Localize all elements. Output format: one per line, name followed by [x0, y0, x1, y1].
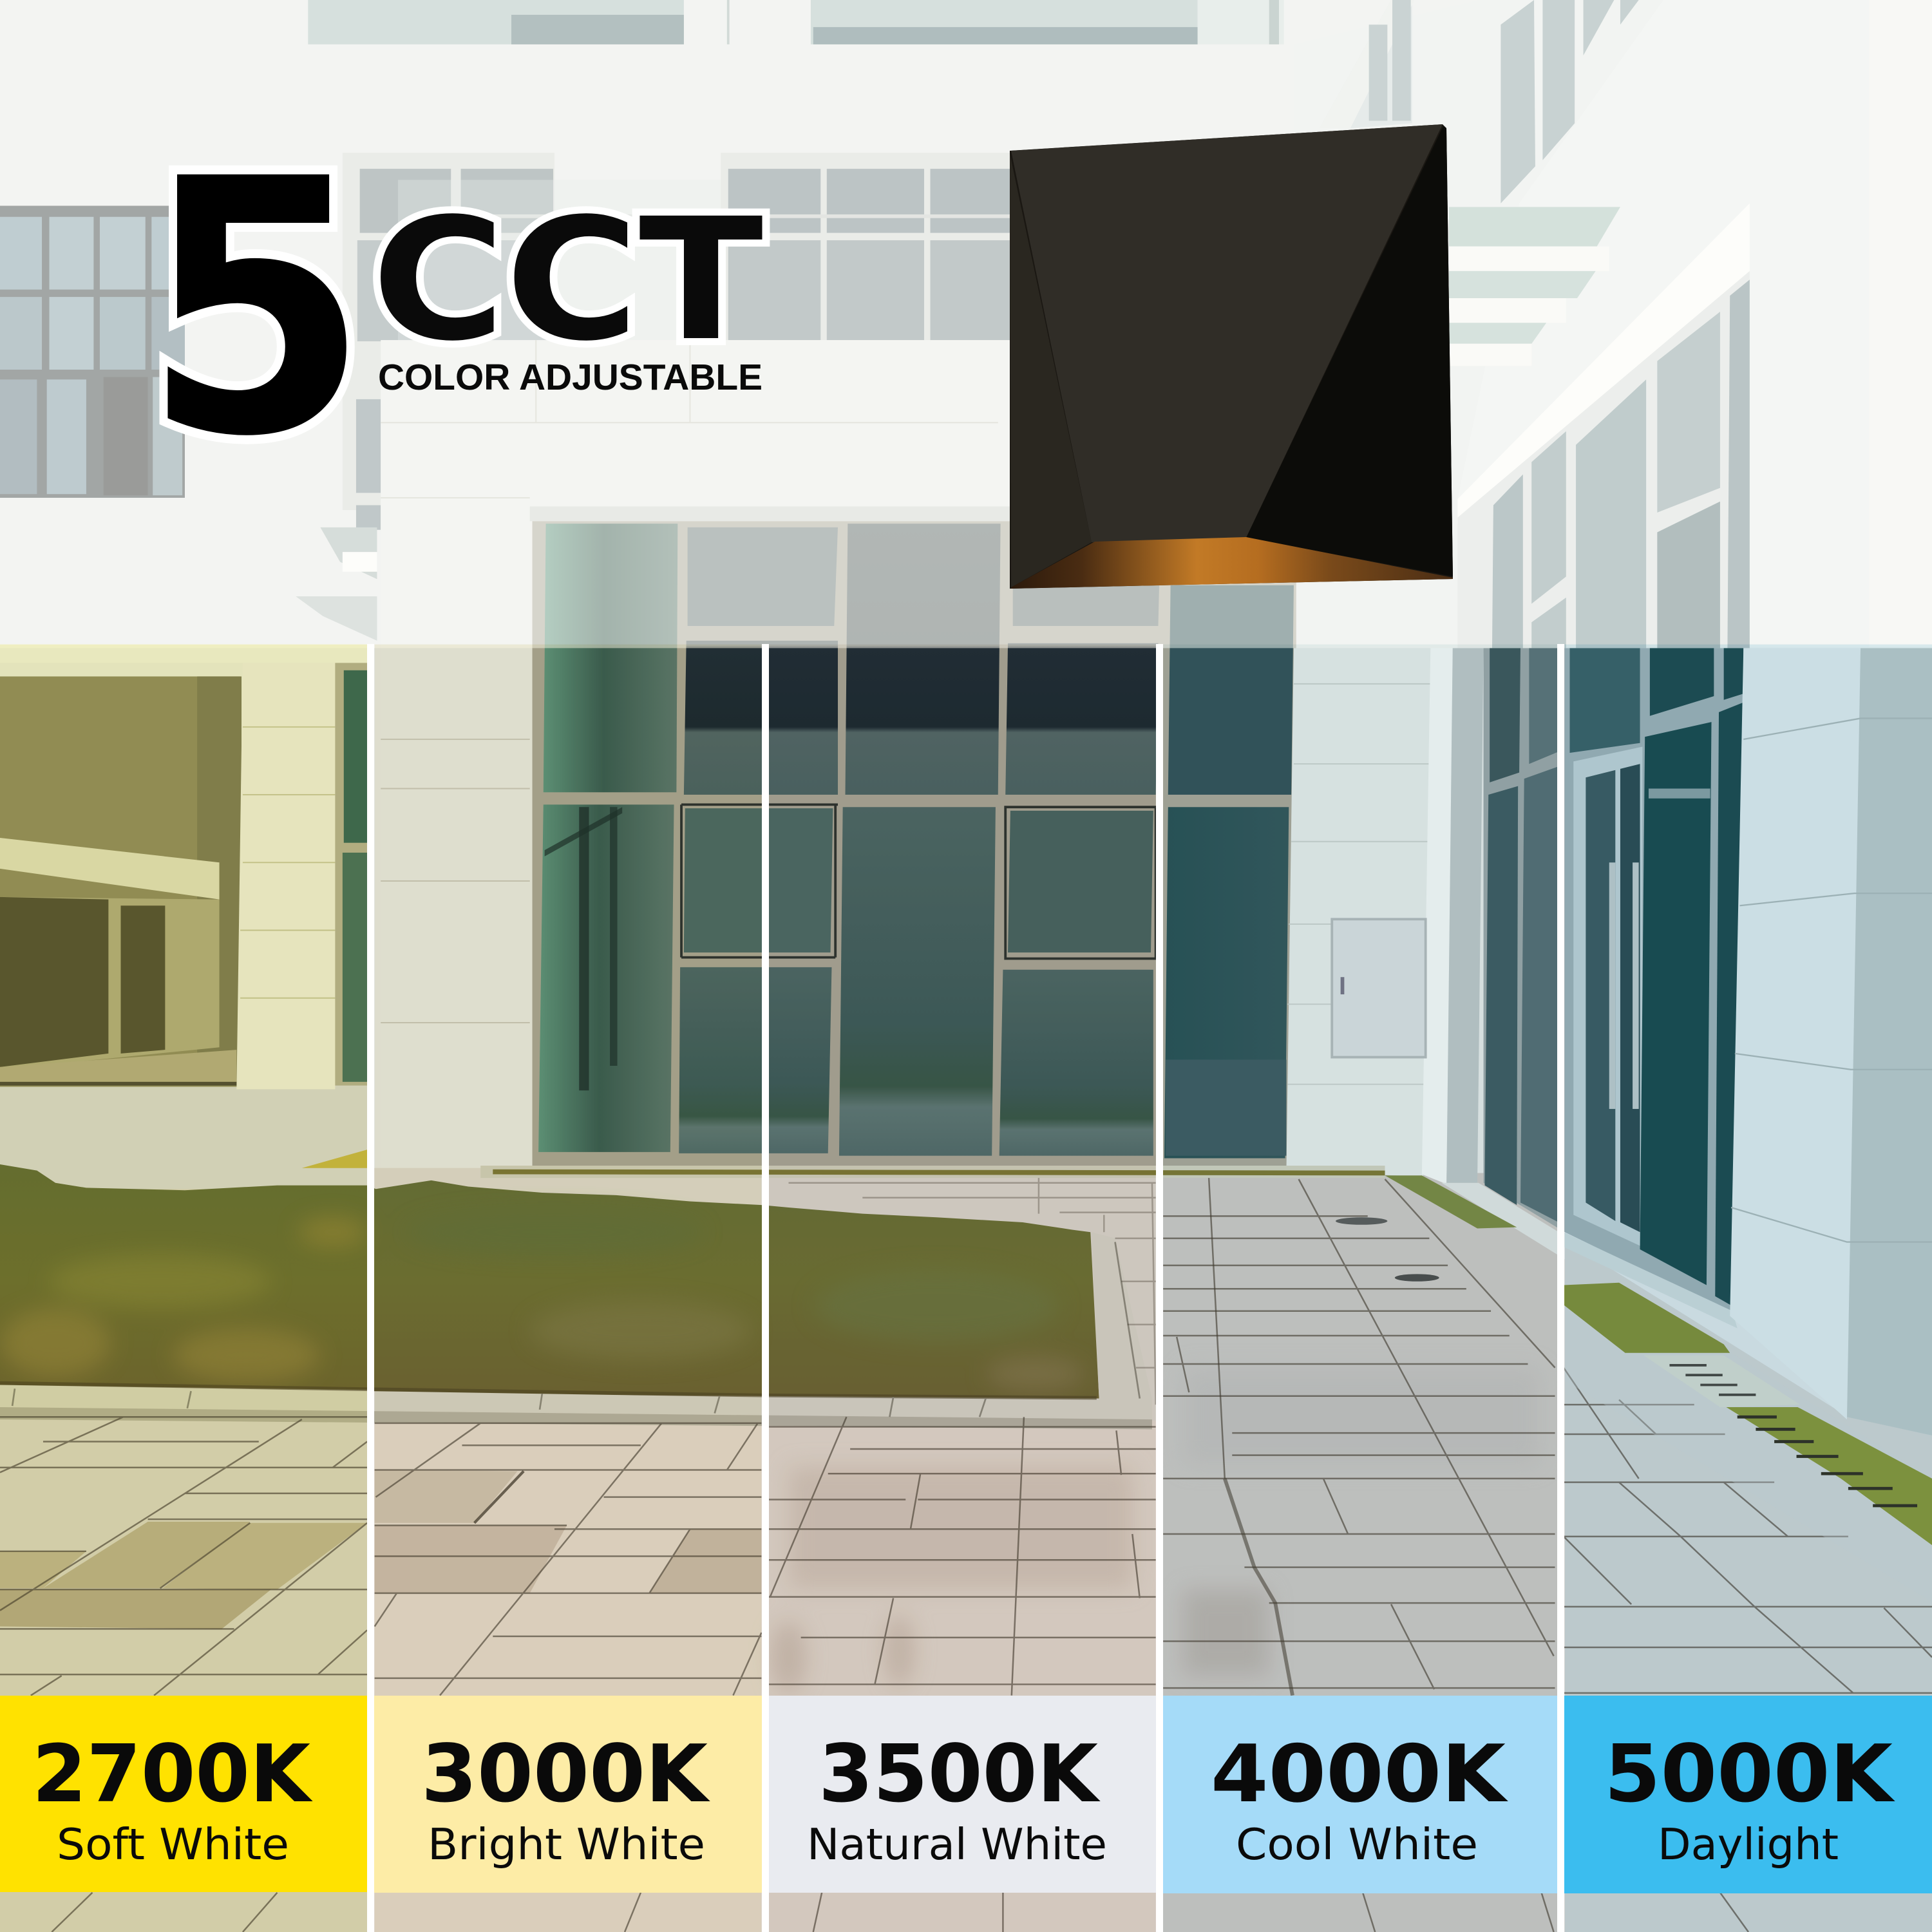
- numeral 5: 5: [143, 104, 369, 513]
- drain gratings: [302, 1150, 1932, 1602]
- upper right wall and glass: [1294, 0, 1932, 647]
- right pillar, lit face: [1730, 648, 1861, 1419]
- colour band: 3000K: Bright White: [428, 1819, 705, 1870]
- colour band: 3500K: Natural White: [807, 1819, 1107, 1870]
- upper centre window: [343, 153, 554, 530]
- column dividers: [367, 644, 1564, 1932]
- colour band: 4000K: [1163, 1696, 1557, 1893]
- colour band: 5000K: [1564, 1696, 1932, 1893]
- left lintel: [0, 648, 370, 663]
- colour band: 4000K: 4000K: [1211, 1728, 1509, 1821]
- lamp front facet: [1011, 124, 1443, 542]
- colour band: 3000K: [374, 1696, 762, 1893]
- colour band: 2700K: [0, 1696, 367, 1892]
- ground plane paving: [0, 1084, 1932, 1932]
- right building glass, upper: [1457, 204, 1750, 648]
- colour band: 5000K: 5000K: [1604, 1728, 1896, 1821]
- right glass and entrance door col 5: [1564, 648, 1743, 1329]
- side face of right pillar, upper: [1869, 0, 1932, 647]
- colour band: 5000K: Daylight: [1658, 1819, 1839, 1870]
- small canopies left: [296, 527, 377, 641]
- kerb around lawn: [0, 1232, 1152, 1429]
- lamp body: [1010, 124, 1453, 589]
- paving joints: [0, 1175, 1932, 1932]
- title: 5 CCT color adjustable: [143, 104, 764, 513]
- front block wall: [381, 340, 1294, 1178]
- upper storey balcony strips: [308, 0, 1284, 44]
- colour band: 3000K: 3000K: [421, 1728, 711, 1821]
- colour temperature tints: [0, 645, 1932, 1932]
- upper right window: [398, 153, 1023, 343]
- colour band: 3500K: 3500K: [819, 1728, 1101, 1821]
- lamp right facet: [1246, 126, 1453, 576]
- subtitle: COLOR ADJUSTABLE: [378, 357, 762, 398]
- colour band: 2700K: Soft White: [57, 1819, 289, 1870]
- left pier and side glass: [236, 661, 370, 1089]
- right front wall and service door: [1286, 648, 1484, 1184]
- lamp left facet: [1010, 153, 1092, 587]
- colour band: 3500K: [769, 1696, 1156, 1893]
- right glass lower section col 4: [1442, 648, 1565, 1259]
- colour band: 2700K: 2700K: [32, 1728, 314, 1821]
- lawn: [0, 1164, 1099, 1399]
- balcony glass canopy: [1449, 207, 1620, 366]
- right pillar, shaded face: [1731, 648, 1932, 1435]
- CCT: CCT: [372, 182, 764, 378]
- colour band: 4000K: Cool White: [1236, 1819, 1478, 1870]
- product: geometric wall light: [1010, 124, 1453, 589]
- paving shading: [0, 1368, 1540, 1694]
- left arcade and doors: [0, 661, 243, 1087]
- glass panes: [538, 524, 1294, 1158]
- lamp copper underside: [1011, 537, 1453, 589]
- curtain wall frame: [533, 521, 1296, 1171]
- left upper window: [0, 206, 185, 498]
- white haze over upper half: [0, 0, 1932, 648]
